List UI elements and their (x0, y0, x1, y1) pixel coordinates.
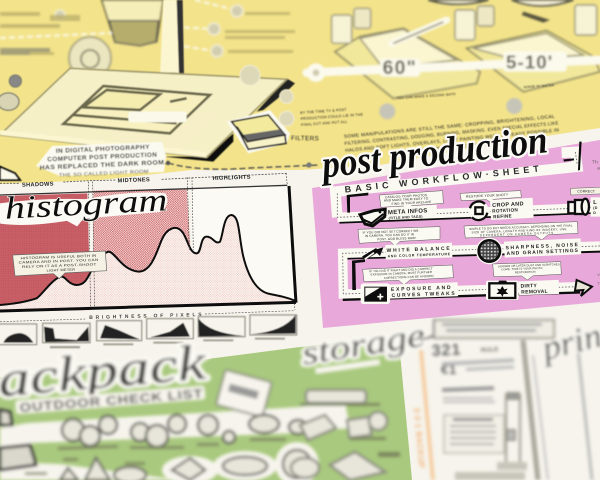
dotted zone dividers (88, 173, 295, 310)
subtitle: outdoor check list: OUTDOOR CHECK LIST (19, 387, 204, 415)
trays: 60 seconds and 5-10 minutes: 5-10' (506, 52, 553, 73)
step: exposure and curves tweaks: EXPOSURE AND (391, 285, 451, 293)
text block: manipulations note: SOME MANIPULATIONS ARE STILL THE SAME: CROPPING, BRIGHTENING, LOCAL (344, 114, 555, 139)
step: dirty removal: DIRTY (521, 283, 538, 290)
side notes at right edge of pink panel: Th (592, 159, 598, 164)
storage note: 3-2-1 rule: 321 (431, 341, 462, 360)
step: sharpness noise and grain: SIZE OF CAMERA, LENGTH AND KIND OF IMAGERY. USE (472, 227, 567, 234)
upper road band behind subtitle (335, 152, 577, 217)
panel: histogram (0, 173, 296, 322)
icon: clipboard (216, 370, 272, 417)
orange vertical rule with label (412, 350, 433, 480)
step: crop and rotation refine: ROTATION (492, 207, 519, 214)
text block: manipulations note: FILTERING, CONTRASTING, DODGING, BURNING, MASKING. EVEN SPECIAL EFFECTS LIKE (344, 120, 559, 146)
brightness of pixels label: BRIGHTNESS OF PIXELS (89, 312, 203, 321)
text block: numbered notes: FINAL CUT AND PUT ALL (301, 120, 348, 127)
thumbnail 2 (43, 323, 90, 343)
step: exposure and curves tweaks: CURVES TWEAKS (392, 291, 455, 299)
panel: pink post production section (312, 140, 600, 328)
workflow road dashed centre line (337, 152, 600, 294)
step: crop and rotation refine: CROP AND (492, 201, 524, 209)
step: meta infos: META INFOS (388, 208, 428, 216)
step: meta infos (360, 191, 443, 226)
step: meta infos: FIND IN YOUR ARCHIVE (392, 200, 432, 206)
text block: numbered notes: YOU CAN MAKE A SECOND BATH (396, 92, 456, 100)
callout: histogram note: CAMERA AND IN POST. YOU CAN (19, 258, 99, 265)
highlights zone background (192, 185, 295, 305)
thumbnail 4 (147, 319, 193, 339)
area under histogram curve (0, 215, 295, 312)
workflow road (337, 207, 600, 294)
panel: yellow dark room section (0, 0, 600, 184)
step: exposure and curves tweaks: EXPOSURE IN CAMERA, MOST FURTHER (371, 270, 432, 277)
step: meta infos: AND MAKE THEM EASY TO (384, 196, 429, 203)
text block: manipulations note: ANALOG POST PRODUCTION DARK ROOM (396, 139, 506, 155)
step: white balance: WHITE BALANCE (387, 246, 450, 254)
callout: histogram note: LIGHT METER (47, 268, 76, 273)
storage note: 3-2-1 rule (431, 341, 514, 403)
brightness of pixels label (0, 311, 295, 322)
title: histogram (0, 181, 169, 231)
text block: numbered notes (299, 83, 556, 127)
enlarger head (102, 0, 163, 46)
shadows solid red zone (0, 193, 91, 312)
histogram frame (0, 185, 296, 311)
caption: digital photography dark room: COMPUTER POST PRODUCTION (47, 151, 157, 163)
orange vertical rule with label: 3·2·1 BACKUP (412, 407, 426, 469)
enlarger column (154, 0, 187, 84)
backpack row 1 icons (62, 415, 307, 447)
dashed arrow from caption to post production (166, 161, 320, 169)
caption: digital photography dark room: HAS REPLACED THE DARK ROOM. (39, 159, 167, 172)
stair shapes at lower right (455, 462, 527, 480)
caption plate on tray (128, 112, 187, 122)
text block: manipulations note (344, 113, 560, 160)
text block: numbered notes: PRODUCTION COULD LIE IN THE (300, 113, 364, 121)
callout: histogram note (13, 251, 107, 279)
text block: numbered notes: BY THE TIME TV & POST (300, 108, 347, 115)
faint grey text blocks (0, 12, 295, 55)
step: white balance: IN CAMERA, YOU CAN DO IT IN (365, 232, 414, 238)
step: crop and rotation refine (460, 191, 534, 221)
text block: numbered notes: RINSE IN WATER (524, 83, 555, 89)
title: storage: storage (300, 318, 428, 373)
trays: 60 seconds and 5-10 minutes (307, 0, 600, 119)
step: lens corrections: (D (593, 206, 598, 210)
left edge icons (0, 410, 36, 470)
section: backpack (foreground, blurred) (0, 314, 600, 480)
title: backpack: ackpack (0, 333, 209, 407)
white strips between backpack rows (0, 402, 350, 480)
backpack row 2 icons (60, 450, 311, 480)
section: dark room illustration (far, blurred) (0, 0, 600, 119)
zone labels: shadows midtones highlights (0, 173, 287, 189)
callout number dots (55, 5, 243, 57)
step: exposure and curves tweaks (361, 265, 458, 304)
storage device icons (291, 390, 387, 480)
icon: filter box (227, 110, 290, 153)
thumbnail captions (50, 338, 285, 348)
caption: digital photography dark room (36, 142, 167, 180)
step: crop and rotation refine: REFINE (493, 213, 512, 219)
step: sharpness noise and grain: AND GRAIN SETTINGS (506, 248, 579, 257)
title: post production: post production (317, 119, 550, 187)
step: lens corrections (568, 187, 600, 217)
side notes at right edge of pink panel (592, 159, 600, 286)
step: sharpness noise and grain: DEPENDENT ON CAMERA OUTPUTS (480, 231, 553, 237)
zone labels: shadows midtones highlights: HIGHLIGHTS (213, 175, 251, 182)
section: dark room base and captions (nearer focus) (0, 0, 560, 180)
thumbnail 1 (0, 324, 37, 345)
histogram curve line (0, 215, 295, 305)
caption: digital photography dark room: IN DIGITAL PHOTOGRAPHY (56, 144, 151, 155)
step: lens corrections: CORRECT (577, 190, 595, 194)
vertical tower box (506, 393, 520, 465)
step: white balance: POST. GOD BLESS RAW! (377, 236, 416, 241)
thumbnail 3 (97, 321, 142, 341)
enlarger base board (0, 68, 295, 162)
small callout dots right of base (240, 65, 294, 126)
step: meta infos: CATALOG YOUR PHOTOS (385, 193, 427, 199)
thumbnail 5 (198, 317, 245, 337)
road inner black bars (347, 142, 582, 290)
bottom text box under pink panel (420, 320, 554, 340)
panel: green backpack section (0, 342, 412, 480)
step: dirty removal: COME. TIME IS YOUR PHOTO (501, 266, 543, 271)
caption: digital photography dark room: THE SO CALLED LIGHT ROOM (59, 169, 149, 179)
step: crop and rotation refine: RESTORE YOUR SHOT? (466, 193, 508, 199)
vertical column rules (523, 340, 592, 480)
arrow head at road end (575, 280, 592, 296)
panel: post production workflow (317, 119, 600, 304)
dashed callout lines upper left (0, 0, 235, 51)
workflow road shadow (339, 209, 600, 297)
subtitle: basic workflow sheet: BASIC WORKFLOW·SHEET (344, 163, 541, 195)
text block: manipulations note: HALOS AND SOFT LIGHTS, OVERLAYS, LIGHT PAINTING WERE ALREADY POSSIBLE IN (345, 127, 559, 153)
trays: 60 seconds and 5-10 minutes: 60" (383, 58, 417, 79)
tray on base board (63, 86, 210, 133)
midtones halftone zone (93, 188, 197, 308)
step: sharpness noise and grain: SHARPNESS, NOISE (505, 242, 579, 251)
step: dirty removal: REMOVAL (521, 289, 548, 296)
title: histogram: histogram (4, 181, 168, 226)
step: sharpness noise and grain: SIMPLE TO DO BUT NEEDS ACCURACY. DEPENDING ON THE FINAL (469, 223, 573, 231)
side notes at right edge of pink panel: T (597, 281, 600, 286)
label: filters: FILTERS (291, 135, 319, 142)
blurred row captions (25, 438, 286, 475)
storage subtitle (315, 359, 380, 374)
step: exposure and curves tweaks: IF YOU DID IT RIGHT AND DID A CORRECT (369, 267, 433, 273)
callout: histogram note: HISTOGRAM IS USEFUL BOTH IN (21, 254, 97, 260)
storage note: 3-2-1 rule: RULE (481, 347, 499, 354)
step: lens corrections: L (593, 200, 597, 206)
thumbnail 6 (250, 315, 297, 335)
icons cropped at left edge (0, 75, 21, 180)
step: dirty removal: RESTORATION (515, 270, 536, 274)
zone labels: shadows midtones highlights: SHADOWS (22, 182, 54, 189)
step: dirty removal: SOONER OR LATER DUST AND SCRATCHES (498, 262, 560, 268)
small histogram examples row (0, 315, 297, 348)
storage captions (300, 403, 400, 457)
storage text box (444, 415, 504, 453)
callout: histogram note: RELY ON IT AS A POST-SHOOT (22, 262, 97, 269)
step: meta infos: (TITLE AND TAGS) (389, 215, 423, 220)
step: sharpness noise and grain (464, 222, 581, 264)
zone labels: shadows midtones highlights: MIDTONES (118, 177, 150, 184)
step: white balance: AND COLOR TEMPERATURE (388, 252, 451, 258)
step: lens corrections: D (593, 211, 596, 215)
step: exposure and curves tweaks: CORRECTIONS CAN BE AVOIDED (384, 274, 434, 280)
step: white balance (358, 227, 452, 260)
step: white balance: IF YOU DID NOT SET CORRECT WB (363, 229, 419, 235)
step: dirty removal (486, 262, 561, 300)
icon: lens filter circle (69, 37, 111, 79)
storage note: 3-2-1 rule: €1 (441, 362, 457, 377)
